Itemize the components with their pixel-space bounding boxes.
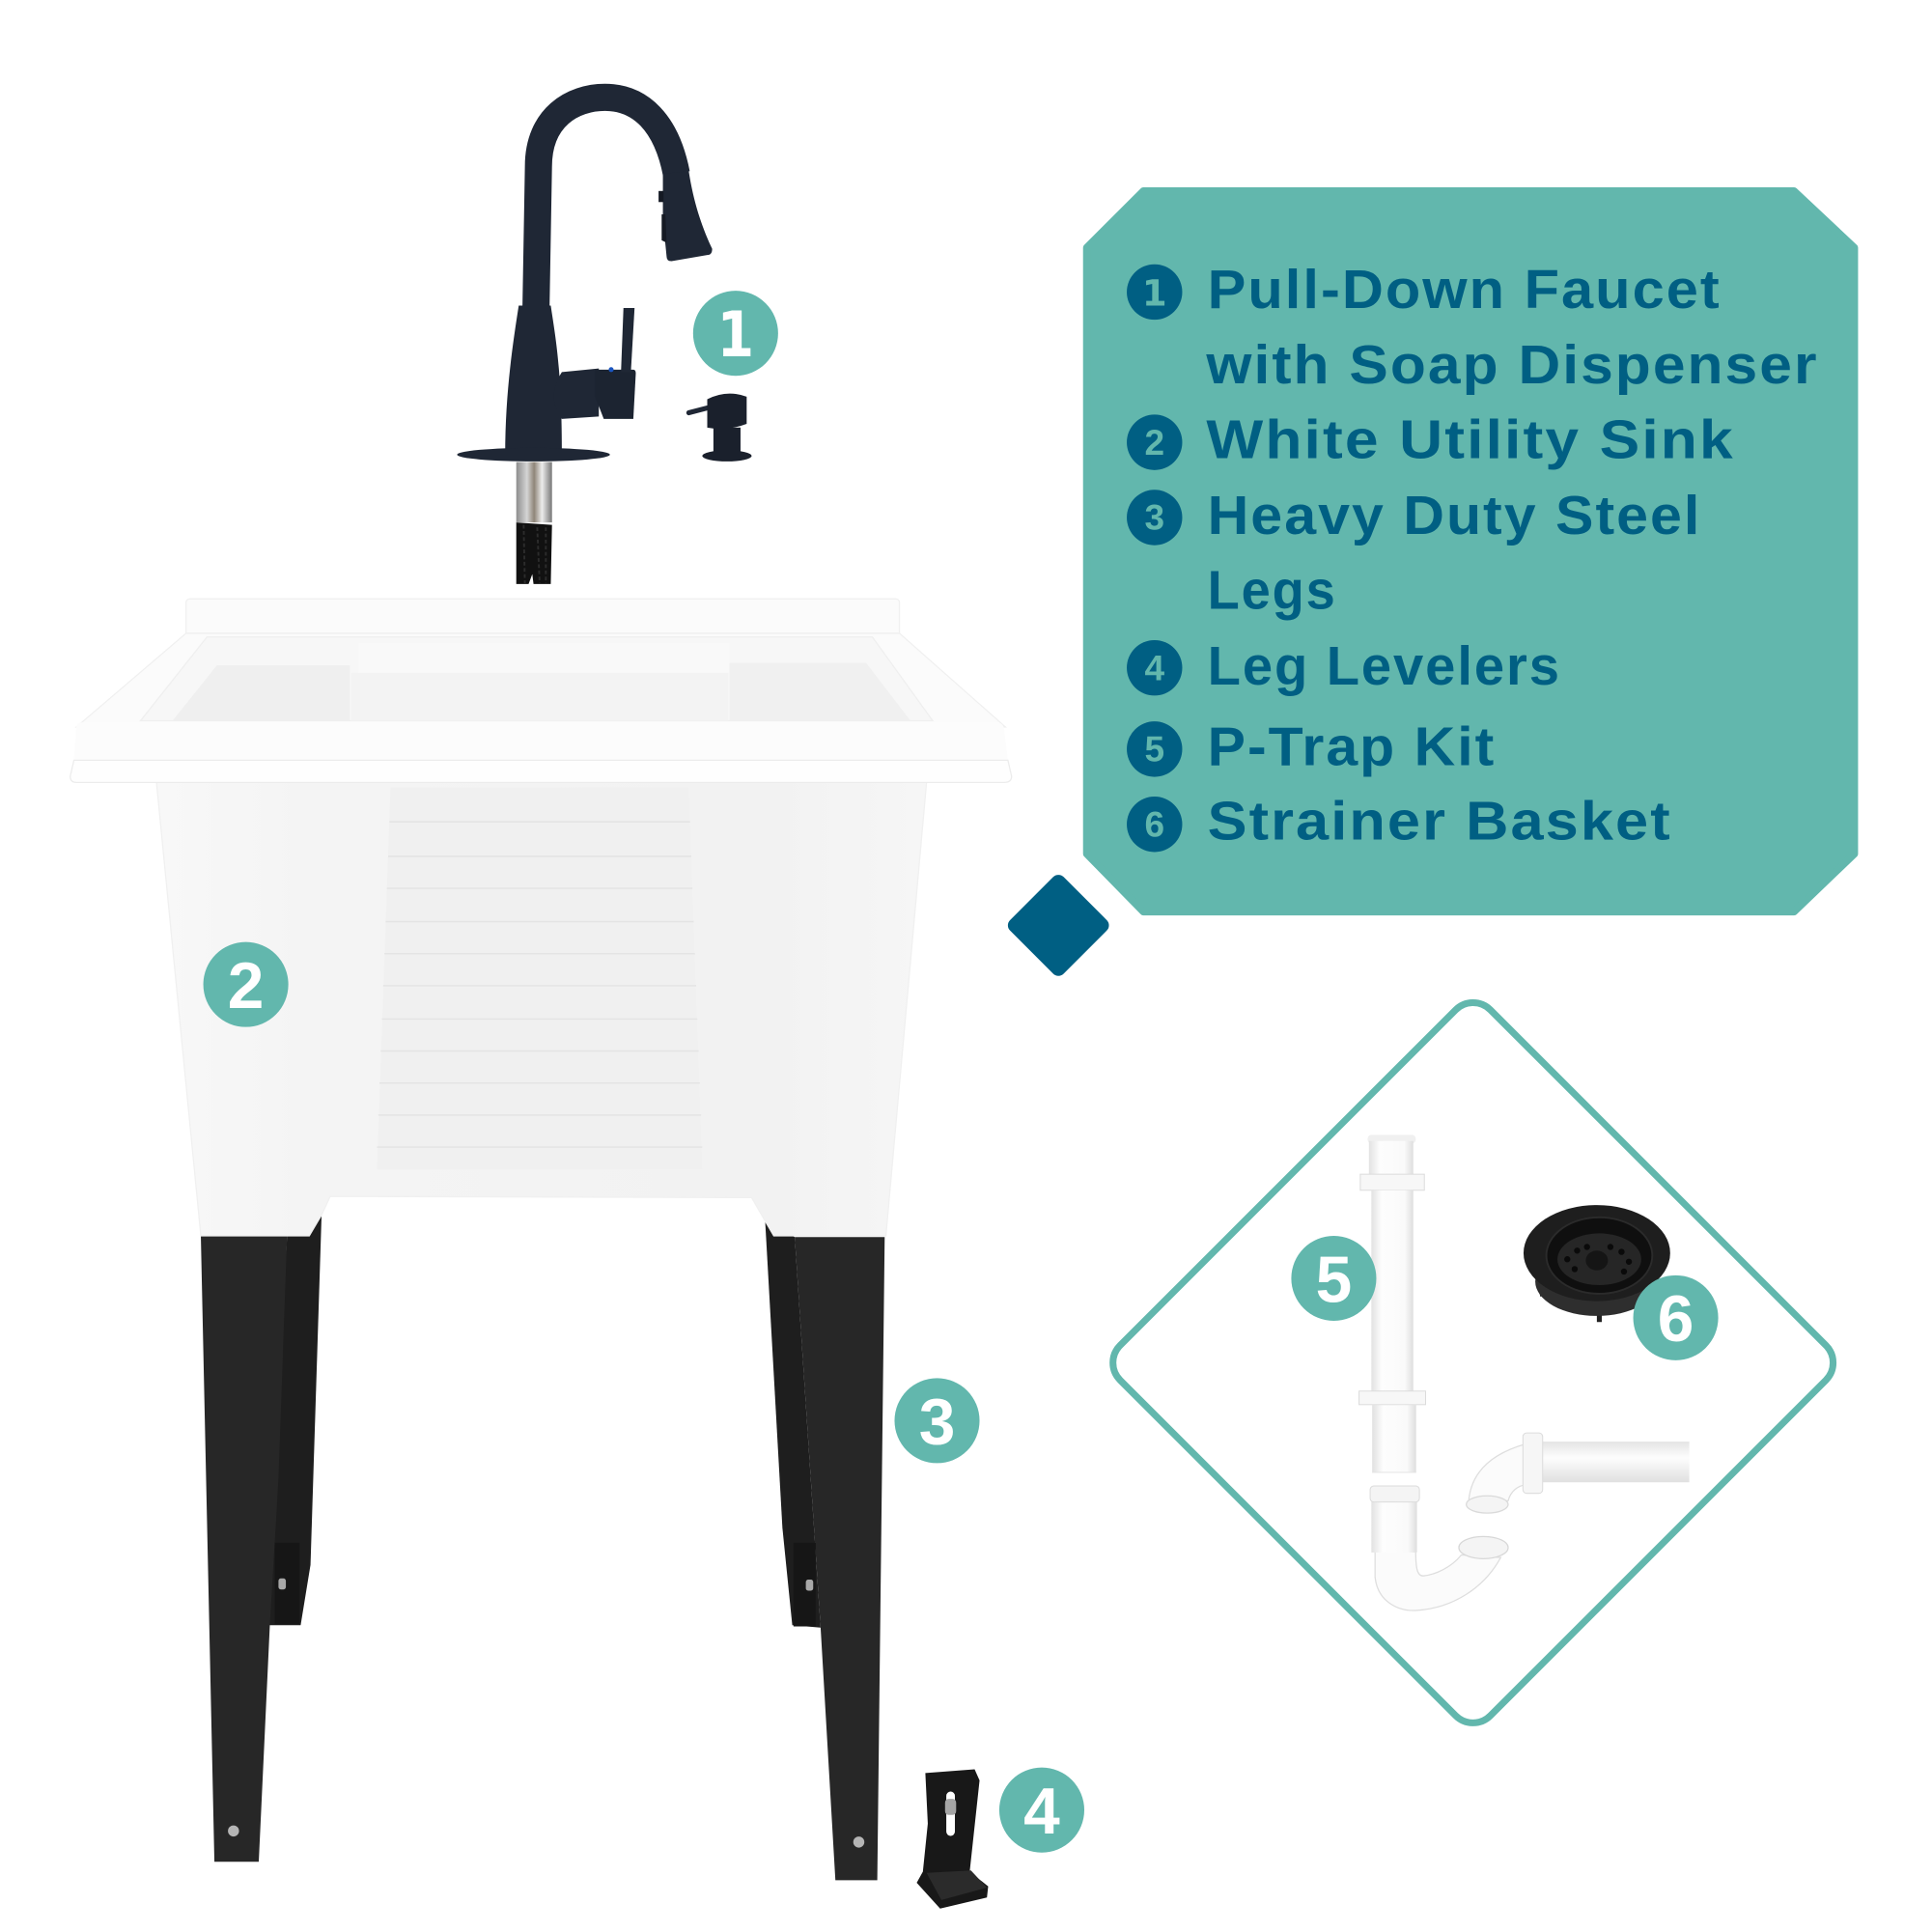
list item 1: faucet: 1 (1142, 272, 1167, 314)
icon: strainer basket (1524, 1205, 1670, 1322)
badge: 3: 3 (919, 1386, 955, 1459)
list item 4: levelers: 4 (1144, 648, 1164, 687)
list item 5: p-trap: 5 (1144, 730, 1164, 770)
badge: 5: 5 (1316, 1244, 1352, 1316)
icon: leg leveler (916, 1770, 988, 1909)
badge: 3 (894, 1378, 980, 1463)
icon: p-trap kit (1359, 1134, 1690, 1610)
sink rim and basin (70, 599, 1012, 782)
panel: parts list (1087, 191, 1855, 911)
badge: 5 (1291, 1236, 1376, 1321)
small blue diamond (1005, 872, 1112, 979)
list item 2: sink: 2 (1144, 423, 1164, 462)
list item 3: legs: Heavy Duty Steel (1208, 485, 1701, 546)
badge: 6: 6 (1658, 1283, 1694, 1356)
list item 3: legs: 3 (1144, 498, 1164, 538)
badge: 2: 2 (228, 950, 264, 1022)
list item 3: legs: Legs (1208, 559, 1337, 620)
badge: 6 (1634, 1275, 1719, 1360)
diamond frame (1103, 993, 1843, 1733)
icon: pull-down faucet (457, 98, 713, 584)
list item 1: faucet: with Soap Dispenser (1205, 334, 1819, 395)
badge: 2 (204, 942, 289, 1027)
list item 1: faucet (1127, 259, 1819, 395)
sink body (156, 782, 927, 1236)
list item 6: strainer: 6 (1144, 805, 1164, 845)
icon: soap dispenser (688, 394, 751, 462)
list item 1: faucet: Pull-Down Faucet (1208, 259, 1722, 320)
badge: 1 (693, 291, 778, 376)
washboard panel (378, 787, 702, 1169)
badge: 1: 1 (717, 299, 754, 372)
list item 6: strainer: Strainer Basket (1208, 791, 1672, 852)
list item 3: legs (1127, 485, 1701, 620)
badge: 4: 4 (1023, 1776, 1060, 1848)
list item 5: p-trap: P-Trap Kit (1208, 715, 1496, 776)
badge: 4 (999, 1768, 1084, 1853)
icon: white utility sink (70, 599, 1012, 1880)
sink legs (201, 1215, 884, 1880)
list item 4: levelers: Leg Levelers (1208, 635, 1561, 696)
list item 2: sink: White Utility Sink (1206, 409, 1735, 470)
